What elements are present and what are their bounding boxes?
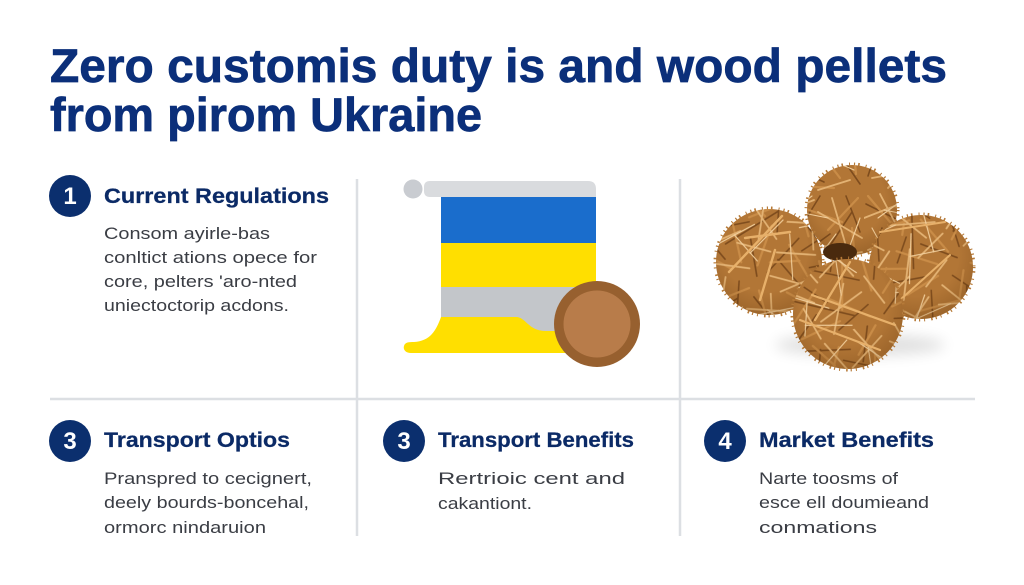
text block: market benefits: conmations [759,518,877,537]
badge 4 [704,420,746,462]
text block: regulations [104,224,317,315]
heading: market benefits: Market Benefits [759,429,934,452]
text block: transport options [104,469,312,537]
text block: transport options: Pranspred to cecignert, [104,469,312,488]
pellet front [778,244,918,384]
text block: transport benefits [438,469,625,513]
image: wood pellets [699,164,993,384]
text block: transport benefits: cakantiont. [438,494,532,513]
badge 1 [49,175,91,217]
panel: current regulations [49,175,329,315]
text block: regulations: conltict ations opece for [104,248,317,267]
heading: current regulations: Current Regulations [104,185,329,208]
text block: regulations: Consom ayirle-bas [104,224,270,243]
text block: market benefits [759,469,929,537]
panel: market benefits [704,420,934,537]
text block: transport options: ormorc nindaruion [104,518,266,537]
text block: transport benefits: Rertrioic cent and [438,469,625,488]
badge 3 [383,420,425,462]
text block: regulations: uniectoctorip acdons. [104,296,289,315]
title: from pirom Ukraine [50,88,482,141]
coin [554,281,640,367]
pellet top [806,164,898,256]
badge 1: 1 [63,183,77,210]
dark gap between pellets [823,243,857,261]
title: Zero customis duty is and wood pellets [50,39,947,92]
heading: transport options: Transport Optios [104,429,290,452]
text block: transport options: deely bourds-boncehal, [104,493,309,512]
badge 3: 3 [63,428,77,455]
panel: transport benefits [383,420,634,513]
pellet left [699,192,839,332]
title [50,39,947,141]
panel: transport options [49,420,312,537]
text block: market benefits: esce ell doumieand [759,493,929,512]
text block: market benefits: Narte toosms of [759,469,898,488]
badge 3: 3 [397,428,411,455]
badge 3 [49,420,91,462]
text block: regulations: core, pelters 'aro-nted [104,272,297,291]
heading: transport benefits: Transport Benefits [438,429,634,452]
badge 4: 4 [718,428,732,455]
icon: Ukraine flag scroll with coin [404,180,640,367]
pellet right [849,195,993,339]
